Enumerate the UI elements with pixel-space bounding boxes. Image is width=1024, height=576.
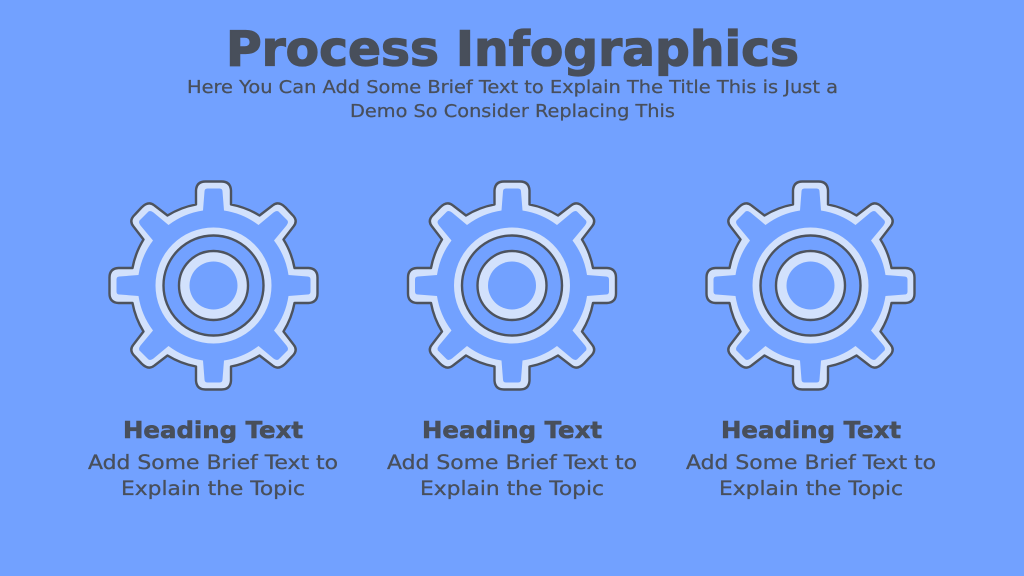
icon: gear 2: [408, 182, 616, 390]
text 2: [387, 451, 637, 500]
subtitle: Here You Can Add Some Brief Text to Explain The Title This is Just a: [187, 78, 838, 98]
text 1: Explain the Topic: [121, 477, 305, 500]
heading 3: Heading Text: [721, 416, 901, 444]
subtitle: Demo So Consider Replacing This: [350, 102, 675, 122]
text 1: [88, 451, 338, 500]
text 3: Add Some Brief Text to: [686, 451, 936, 474]
heading 2: Heading Text: [422, 416, 602, 444]
text 1: Add Some Brief Text to: [88, 451, 338, 474]
text 3: Explain the Topic: [719, 477, 903, 500]
title: Process Infographics: [226, 22, 799, 78]
panel: step 2: [387, 182, 637, 500]
panel: step 3: [686, 182, 936, 500]
text 2: Explain the Topic: [420, 477, 604, 500]
panel: step 1: [88, 182, 338, 500]
icon: gear 3: [706, 182, 914, 390]
text 3: [686, 451, 936, 500]
heading 1: Heading Text: [123, 416, 303, 444]
text 2: Add Some Brief Text to: [387, 451, 637, 474]
subtitle: [187, 78, 838, 122]
icon: gear 1: [110, 182, 318, 390]
